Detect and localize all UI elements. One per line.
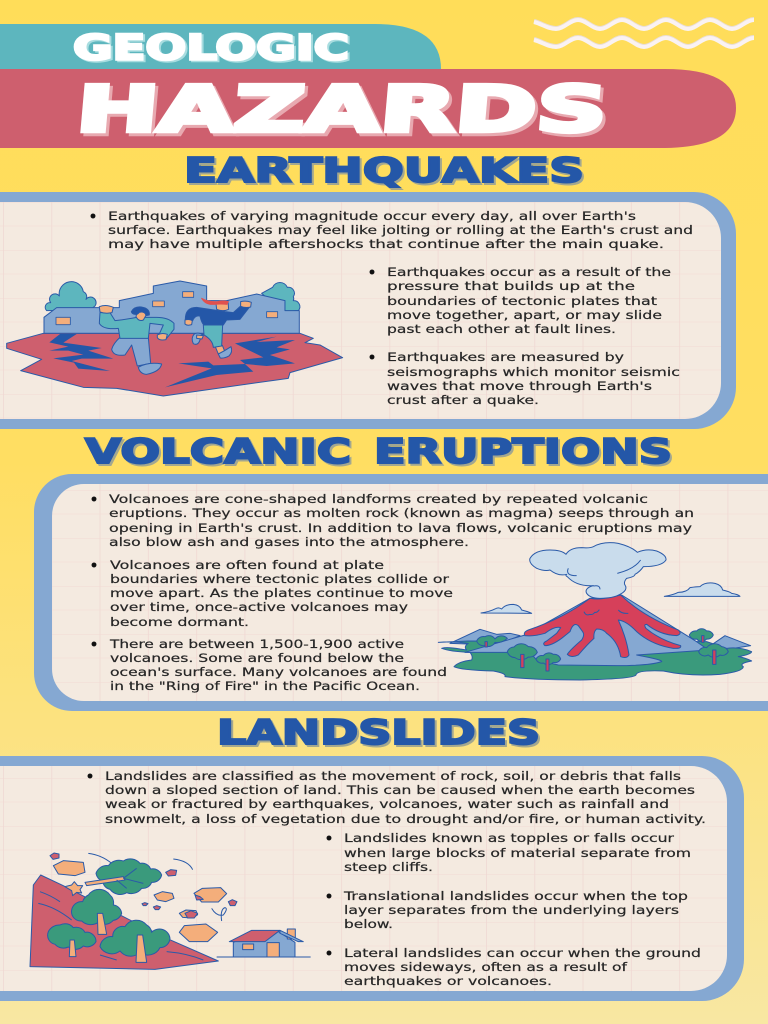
text: earthquake frequency: Earthquakes of varying magnitude occur every day, all over Earth's xyxy=(108,209,636,223)
text: volcano definition: eruptions. They occur as molten rock (known as magma) seeps through an xyxy=(109,506,694,520)
text: active volcanoes: There are between 1,500-1,900 active xyxy=(109,637,404,651)
text: topples and falls: steep cliffs. xyxy=(344,860,433,874)
text: active volcanoes: ocean's surface. Many volcanoes are found xyxy=(110,665,447,679)
text: translational landslides: Translational landslides occur when the top xyxy=(343,889,688,903)
text: topples and falls: Landslides known as topples or falls occur xyxy=(344,831,674,845)
text: earthquake causes: pressure that builds up at the xyxy=(387,279,635,293)
text: earthquake frequency: may have multiple aftershocks that continue after the main quake. xyxy=(108,237,664,251)
title banner: Geologic xyxy=(0,24,441,70)
text: volcano definition: Volcanoes are cone-shaped landforms created by repeated volcanic xyxy=(109,492,648,506)
heading: Volcanic Eruptions: ERUPTIONS xyxy=(374,432,672,472)
text: topples and falls: when large blocks of material separate from xyxy=(344,846,691,860)
text: volcano locations: over time, once-active volcanoes may xyxy=(110,600,408,614)
title banner: Hazards: HAZARDS xyxy=(77,75,613,149)
panel: volcanic eruptions xyxy=(34,474,768,711)
title banner: Geologic: GEOLOGIC xyxy=(73,28,349,68)
text: earthquake frequency xyxy=(91,209,693,251)
heading: Volcanic Eruptions: VOLCANIC xyxy=(87,434,353,474)
heading: Earthquakes xyxy=(184,151,586,193)
title banner: Geologic: GEOLOGIC xyxy=(75,30,351,70)
text: earthquake measurement: seismographs which monitor seismic xyxy=(387,365,680,379)
text: volcano definition: opening in Earth's crust. In addition to lava flows, volcanic eruptions may xyxy=(109,521,692,535)
text: landslide definition: down a sloped section of land. This can be caused when the earth becomes xyxy=(105,783,695,797)
text: earthquake causes: boundaries of tectonic plates that xyxy=(387,294,657,308)
figure: running man xyxy=(99,305,174,374)
text: earthquake measurement: Earthquakes are measured by xyxy=(387,350,624,364)
heading: Volcanic Eruptions: VOLCANIC xyxy=(85,432,351,472)
icon: erupting volcano xyxy=(438,543,752,680)
text: volcano locations: Volcanoes are often found at plate xyxy=(110,558,384,572)
panel: landslides xyxy=(0,756,744,1001)
text: volcano locations: become dormant. xyxy=(110,615,249,629)
text: earthquake causes: move together, apart, or may slide xyxy=(387,308,662,322)
text: landslide definition: snowmelt, a loss of vegetation due to drought and/or fire, or human activity. xyxy=(105,812,706,826)
text: earthquake measurement: crust after a quake. xyxy=(387,393,539,407)
icon: people running in earthquake xyxy=(7,281,343,396)
text: lateral landslides xyxy=(327,946,701,988)
text: translational landslides: layer separates from the underlying layers xyxy=(344,903,679,917)
heading: Earthquakes: EARTHQUAKES xyxy=(184,151,584,191)
text: earthquake causes xyxy=(370,265,671,336)
text: translational landslides: below. xyxy=(344,917,393,931)
text: lateral landslides: Lateral landslides can occur when the ground xyxy=(344,946,701,960)
text: volcano locations: move apart. As the plates continue to move xyxy=(110,586,453,600)
text: topples and falls xyxy=(327,831,691,874)
text: active volcanoes xyxy=(92,637,447,693)
heading: Volcanic Eruptions: ERUPTIONS xyxy=(376,434,674,474)
text: volcano definition: also blow ash and gases into the atmosphere. xyxy=(109,535,469,549)
decorative white waves xyxy=(534,19,754,47)
text: earthquake causes: Earthquakes occur as a result of the xyxy=(387,265,671,279)
heading: Landslides: LANDSLIDES xyxy=(219,715,542,755)
text: earthquake measurement: waves that move through Earth's xyxy=(387,379,652,393)
text: lateral landslides: earthquakes or volcanoes. xyxy=(344,974,552,988)
text: landslide definition: weak or fractured by earthquakes, volcanoes, water such as rainfall and xyxy=(105,797,669,811)
heading: Landslides: LANDSLIDES xyxy=(217,713,540,753)
text: volcano definition xyxy=(92,492,694,549)
heading: Earthquakes: EARTHQUAKES xyxy=(186,153,586,193)
panel: earthquakes xyxy=(0,192,736,429)
text: landslide definition: Landslides are classified as the movement of rock, soil, or debris that falls xyxy=(105,769,681,783)
text: active volcanoes: in the "Ring of Fire" in the Pacific Ocean. xyxy=(110,679,420,693)
title banner: Hazards: HAZARDS xyxy=(74,72,610,146)
text: volcano locations xyxy=(92,558,453,629)
heading: Volcanic Eruptions xyxy=(85,432,674,474)
text: landslide definition xyxy=(88,769,706,826)
figure: running woman xyxy=(185,298,251,358)
text: earthquake frequency: surface. Earthquakes may feel like jolting or rolling at the Earth's crust and xyxy=(108,223,693,237)
title banner: Hazards xyxy=(0,69,736,149)
text: translational landslides xyxy=(327,889,688,931)
text: active volcanoes: volcanoes. Some are found below the xyxy=(110,651,404,665)
text: lateral landslides: moves sideways, often as a result of xyxy=(344,960,628,974)
text: volcano locations: boundaries where tectonic plates collide or xyxy=(110,572,449,586)
text: earthquake measurement xyxy=(370,350,680,407)
text: earthquake causes: past each other at fault lines. xyxy=(387,322,616,336)
icon: landslide with house xyxy=(30,853,311,969)
